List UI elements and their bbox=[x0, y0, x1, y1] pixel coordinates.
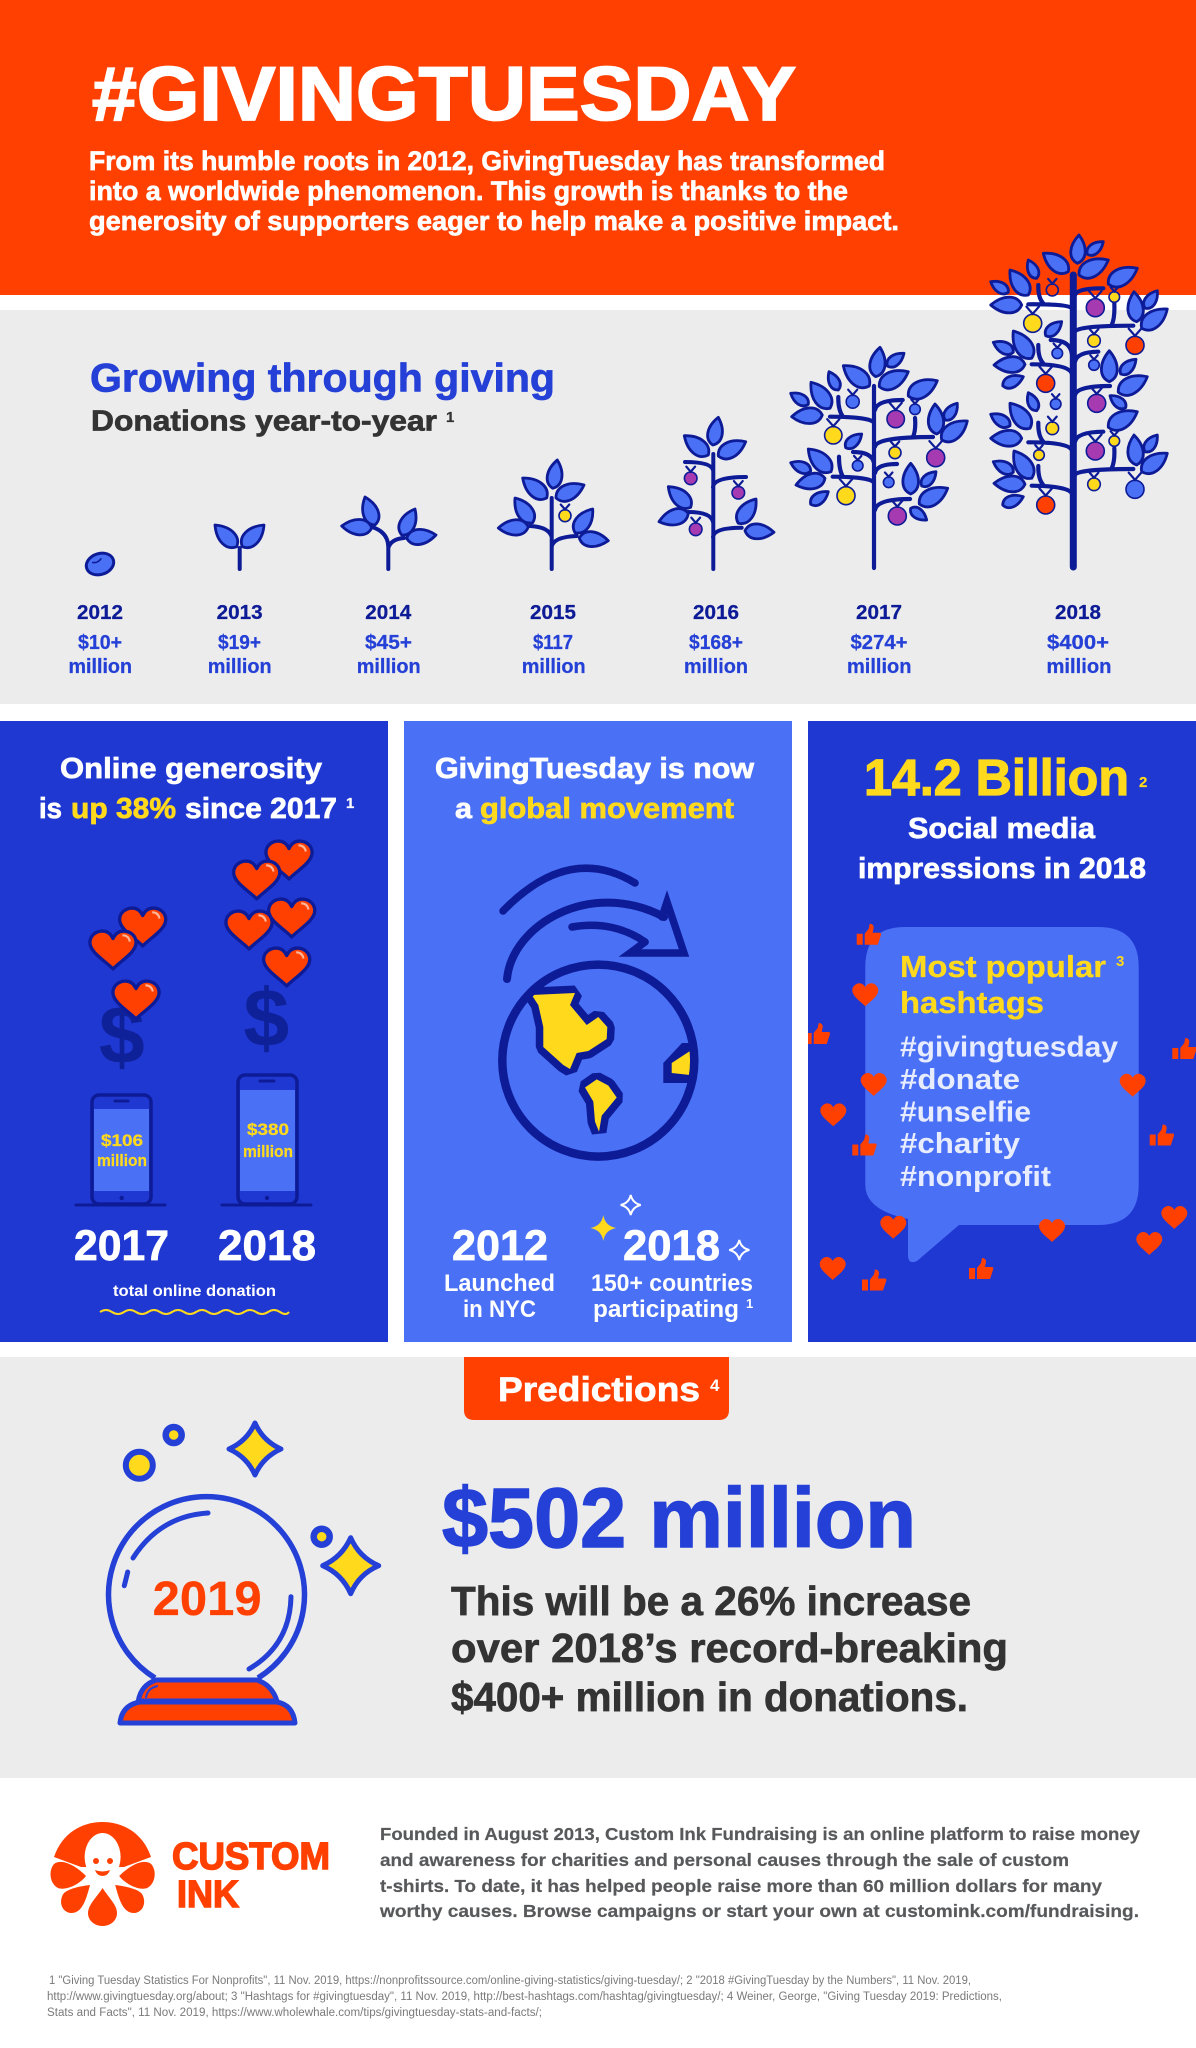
about text: Founded in August 2013, Custom Ink Fundraising is an online platform to raise money bbox=[380, 1824, 1140, 1844]
column labels: 2014 bbox=[357, 602, 421, 678]
hashtag list bbox=[900, 1032, 1118, 1193]
column labels: 2015: 2015 bbox=[530, 602, 576, 624]
panel heading: GivingTuesday is now bbox=[435, 753, 754, 785]
column labels: 2017 bbox=[847, 602, 912, 678]
predictions tab: 4 bbox=[710, 1376, 720, 1395]
column labels: 2017: 2017 bbox=[856, 602, 902, 624]
icons: thumbs up bbox=[806, 924, 1196, 1290]
stat: 2012: 2012 bbox=[452, 1222, 548, 1270]
title: #GIVINGTUESDAY bbox=[92, 52, 796, 137]
icon: crystal ball: 2019 bbox=[153, 1573, 262, 1626]
icon: phone 2017 bbox=[76, 1095, 165, 1205]
icon: rotating arrows bbox=[503, 868, 684, 979]
predictions tab: Predictions bbox=[498, 1371, 700, 1409]
icon: sparkles bbox=[590, 1195, 749, 1260]
subheading bbox=[858, 813, 1146, 885]
logo: Custom Ink: INK bbox=[177, 1874, 240, 1916]
header panel bbox=[0, 0, 1196, 295]
column labels: 2018: $400+ bbox=[1047, 632, 1109, 654]
icons: hearts bbox=[820, 983, 1187, 1280]
icon: plant 2014 bbox=[341, 494, 437, 569]
footnotes bbox=[47, 1975, 1002, 2019]
logo: Custom Ink: CUSTOM bbox=[172, 1836, 330, 1878]
caption: total online donation bbox=[113, 1283, 276, 1300]
speech bubble bbox=[865, 927, 1139, 1262]
prediction text bbox=[451, 1578, 1008, 1720]
footnotes: 1 "Giving Tuesday Statistics For Nonprofits", 11 Nov. 2019, https://nonprofitssource.com/online-giving-statistics/giving-tuesday/; 2 "2018 #GivingTuesday by the Numbers", 11 Nov. 2019, bbox=[49, 1975, 971, 1987]
icon: tree 2018 bbox=[988, 235, 1172, 567]
big number: 2 bbox=[1139, 774, 1147, 791]
bubble heading: hashtags bbox=[900, 985, 1044, 1020]
column labels: 2012: 2012 bbox=[77, 602, 123, 624]
column labels: 2018: million bbox=[1046, 656, 1112, 678]
column labels: 2016 bbox=[684, 602, 748, 678]
column labels: 2018: 2018 bbox=[1055, 602, 1101, 624]
heading: Growing through giving bbox=[90, 356, 555, 400]
prediction text: $400+ million in donations. bbox=[451, 1674, 968, 1720]
panel heading: a bbox=[455, 793, 473, 825]
panel heading: 1 bbox=[346, 795, 354, 812]
icon: sparkles and bubbles bbox=[126, 1423, 379, 1594]
icon: phone 2018 bbox=[222, 1075, 311, 1205]
column labels: 2014: 2014 bbox=[365, 602, 412, 624]
panel heading: is bbox=[39, 793, 62, 825]
panel heading: Online generosity bbox=[60, 753, 322, 785]
column labels: 2015: million bbox=[522, 656, 586, 678]
icon: phone 2017: million bbox=[97, 1151, 147, 1170]
icon: crystal ball bbox=[109, 1497, 304, 1723]
icon: bean 2012 bbox=[83, 550, 117, 578]
subheading: 1 bbox=[446, 409, 454, 426]
column labels: 2013: $19+ bbox=[218, 632, 261, 654]
stat: 2018: 2018 bbox=[623, 1222, 720, 1270]
icon: phone 2017: $106 bbox=[101, 1131, 143, 1150]
column labels: 2013 bbox=[208, 602, 272, 678]
panel: predictions bbox=[0, 1357, 1196, 1778]
column labels: 2017: $274+ bbox=[850, 632, 908, 654]
subheading: impressions in 2018 bbox=[858, 853, 1146, 885]
panel heading: global movement bbox=[480, 793, 734, 825]
footnotes: http://www.givingtuesday.org/about; 3 "Hashtags for #givingtuesday", 11 Nov. 2019, http://best-hashtags.com/hashtag/givingtuesday/; 4 Weiner, George, "Giving Tuesday 2019: Predictions, bbox=[47, 1991, 1002, 2003]
hashtag list: #nonprofit bbox=[900, 1161, 1051, 1193]
icon: sprout 2013 bbox=[209, 519, 270, 569]
stat: 2018 bbox=[591, 1222, 753, 1323]
stat: 2012: Launched bbox=[444, 1270, 555, 1297]
hashtag list: #charity bbox=[900, 1128, 1020, 1160]
column labels: 2014: $45+ bbox=[365, 632, 412, 654]
panel: social media bbox=[806, 721, 1196, 1342]
bubble heading: Most popular bbox=[900, 949, 1106, 984]
column labels: 2016: million bbox=[684, 656, 748, 678]
predictions tab bbox=[464, 1357, 729, 1420]
stat: 2012: in NYC bbox=[463, 1296, 536, 1323]
stat: 2012 bbox=[444, 1222, 555, 1323]
icon: dollar sign 2018: $ bbox=[244, 973, 289, 1064]
column labels: 2014: million bbox=[357, 656, 421, 678]
about text: and awareness for charities and personal causes through the sale of custom bbox=[380, 1850, 1069, 1870]
panel heading bbox=[435, 753, 754, 825]
column labels: 2017: million bbox=[847, 656, 912, 678]
bubble heading: 3 bbox=[1116, 953, 1124, 970]
column labels: 2013: 2013 bbox=[217, 602, 263, 624]
icon: phone 2018: $380 bbox=[247, 1120, 289, 1139]
column labels: 2018 bbox=[1046, 602, 1112, 678]
hashtag list: #givingtuesday bbox=[900, 1032, 1118, 1064]
about text bbox=[379, 1824, 1140, 1921]
panel heading: since 2017 bbox=[185, 793, 337, 825]
stat: 2018: 150+ countries bbox=[591, 1270, 753, 1297]
icon: hearts 2017 bbox=[90, 908, 166, 1019]
icon: dollar sign 2017: $ bbox=[99, 990, 145, 1081]
big prediction number: $502 million bbox=[442, 1471, 916, 1565]
column labels: 2015: $117 bbox=[533, 632, 573, 654]
icon: tree 2017 bbox=[788, 346, 972, 568]
icon: globe bbox=[502, 965, 694, 1157]
panel: online generosity bbox=[0, 721, 388, 1342]
yellow wavy underline bbox=[100, 1310, 289, 1314]
intro text: From its humble roots in 2012, GivingTuesday has transformed bbox=[89, 146, 885, 176]
subheading: Social media bbox=[908, 813, 1096, 845]
bubble heading bbox=[900, 949, 1124, 1020]
prediction text: This will be a 26% increase bbox=[451, 1578, 971, 1624]
icon: plant 2015 bbox=[498, 459, 609, 569]
subheading: Donations year-to-year bbox=[91, 406, 437, 438]
column labels: 2012: million bbox=[68, 656, 132, 678]
about text: worthy causes. Browse campaigns or start your own at customink.com/fundraising. bbox=[379, 1901, 1139, 1921]
intro text bbox=[89, 146, 899, 236]
column labels: 2016: $168+ bbox=[689, 632, 743, 654]
panel heading bbox=[39, 753, 354, 825]
intro text: into a worldwide phenomenon. This growth is thanks to the bbox=[89, 176, 848, 206]
icon: hearts 2018 bbox=[226, 841, 315, 986]
panel heading: up 38% bbox=[71, 793, 176, 825]
panel: global movement bbox=[404, 721, 792, 1342]
stat: 2018: participating bbox=[593, 1296, 739, 1323]
column labels: 2016: 2016 bbox=[693, 602, 739, 624]
prediction text: over 2018’s record-breaking bbox=[451, 1625, 1008, 1671]
year label 2018: 2018 bbox=[218, 1222, 316, 1270]
footnotes: Stats and Facts", 11 Nov. 2019, https://www.wholewhale.com/tips/givingtuesday-stats-and-facts/; bbox=[47, 2007, 542, 2019]
icon: phone 2018: million bbox=[243, 1142, 293, 1161]
column labels: 2015 bbox=[522, 602, 586, 678]
column labels: 2012: $10+ bbox=[78, 632, 122, 654]
hashtag list: #donate bbox=[900, 1064, 1020, 1096]
hashtag list: #unselfie bbox=[900, 1096, 1031, 1128]
column labels: 2012 bbox=[68, 602, 132, 678]
icon: tree 2016 bbox=[657, 416, 774, 569]
year label 2017: 2017 bbox=[74, 1222, 169, 1270]
about text: t-shirts. To date, it has helped people raise more than 60 million dollars for many bbox=[380, 1876, 1102, 1896]
column labels: 2013: million bbox=[208, 656, 272, 678]
stat: 2018: 1 bbox=[746, 1296, 753, 1311]
panel: growing through giving bbox=[0, 310, 1196, 704]
intro text: generosity of supporters eager to help make a positive impact. bbox=[89, 206, 899, 236]
logo: Custom Ink bbox=[51, 1822, 330, 1926]
big number: 14.2 Billion bbox=[864, 749, 1129, 806]
